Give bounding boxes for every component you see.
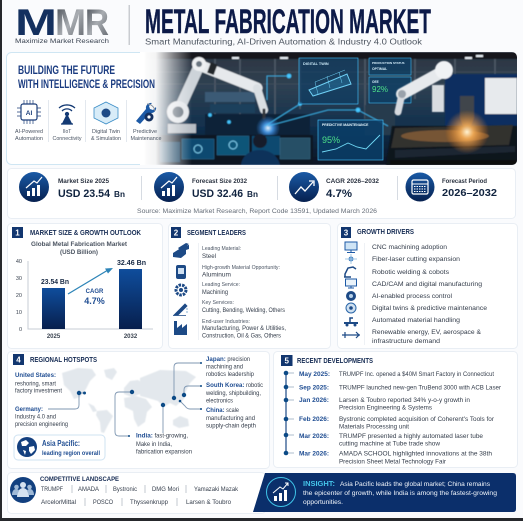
icon: people [10, 477, 36, 503]
label: China: China: scale [206, 407, 240, 414]
label: India: Make in India, [136, 442, 172, 448]
label: United States: reshoring, smart [15, 382, 56, 388]
label: South Korea: electronics [206, 398, 233, 404]
CAGR callout: CAGR [86, 289, 104, 295]
company names: Yamazaki Mazak [194, 487, 239, 493]
panel: key stats [8, 168, 516, 218]
stat: forecast size 2032 [154, 172, 258, 202]
icon labels: Digital Twin [92, 129, 120, 135]
heading 3: GROWTH DRIVERS [357, 229, 414, 236]
label: United States: factory investment [15, 388, 62, 394]
icon labels: Maintenance [130, 136, 162, 142]
callout: Asia Pacific: Asia Pacific: [42, 439, 80, 448]
source note: Source: Maximize Market Research, Report Code 13591, Updated March 2026 [137, 209, 378, 215]
icon labels: & Simulation [91, 136, 121, 142]
label: China: supply-chain depth [206, 424, 256, 430]
header: logo: R [85, 2, 109, 43]
stat: forecast size 2032: USD 32.46 [192, 188, 243, 200]
label: India: fabrication expansion [136, 450, 192, 456]
driver list: CNC machining adoption [372, 244, 447, 251]
panel 3: growth drivers [338, 224, 518, 348]
segment list: Cutting, Bending, Welding, Others [202, 308, 285, 314]
segment list: Leading Material: [202, 246, 241, 252]
label: South Korea: welding, shipbuilding, [205, 391, 261, 397]
event: Sep 2025: Sep 2025: [299, 384, 329, 392]
icon: steel beams [173, 243, 189, 258]
driver list: AI-enabled process control [372, 293, 452, 300]
hero heading: WITH INTELLIGENCE & PRECISION [18, 79, 155, 91]
label: United States [15, 372, 62, 394]
predictive maintenance panel: PREDICTIVE MAINTENANCE [322, 123, 369, 127]
event: Mar 2026 laser tube: TRUMPF presented a highly automated laser tube [339, 434, 484, 440]
driver list: Automated material handling [372, 317, 460, 324]
company names [41, 485, 239, 506]
world map [62, 368, 196, 433]
driver list: Digital twins & predictive maintenance [372, 305, 487, 312]
event: Jan 2026: Jan 2026: [299, 397, 329, 404]
panel 5: recent developments [274, 352, 518, 468]
label: China [206, 407, 256, 430]
stat: forecast period: 2026–2032 [442, 188, 497, 199]
label: South Korea [205, 382, 263, 404]
company names: TRUMPF [41, 487, 63, 493]
stat: market size 2025 [19, 172, 125, 202]
icon: factory [174, 321, 187, 335]
stat: market size 2025: USD 23.54 [58, 188, 111, 200]
label: India [136, 432, 192, 456]
icon labels: Automation [15, 136, 43, 142]
competitive heading: COMPETITIVE LANDSCAPE [40, 476, 120, 483]
label: Germany: Germany: [15, 406, 43, 413]
bar chart [16, 259, 153, 340]
driver list [364, 243, 487, 345]
segment list: Aluminum [202, 272, 231, 278]
predictive maintenance panel: 95% [322, 135, 340, 145]
event: Mar 2026 AMADA: Mar 2026: [299, 450, 329, 458]
laser machine and right robot arm [398, 61, 517, 128]
label: Germany [15, 406, 68, 428]
white fade over photo [140, 50, 192, 167]
company names: ArcelorMittal [41, 500, 76, 506]
subtitle: Smart Manufacturing, AI-Driven Automation & Industry 4.0 Outlook [145, 36, 423, 46]
header divider [128, 5, 130, 45]
panel 1: market size and growth outlook [8, 224, 162, 348]
predictive maintenance panel [318, 120, 383, 160]
stat: market size 2025: Market Size 2025 [58, 179, 110, 185]
event: Feb 2026: Materials Processing unit [339, 424, 409, 430]
segment list: Manufacturing, Power & Utilities, [202, 326, 286, 332]
segment list: Steel [202, 254, 216, 260]
chart title: Global Metal Fabrication Market [31, 242, 127, 248]
stat: CAGR [289, 172, 380, 202]
icon: digital twin cube [94, 102, 118, 124]
label: South Korea: South Korea: robotic [206, 382, 263, 389]
bar chart: 0 [19, 327, 22, 333]
hero heading: BUILDING THE FUTURE [18, 65, 115, 77]
icon: predictive maintenance wrench and gear [136, 103, 156, 124]
digital twin panel [299, 58, 358, 104]
label: Japan: robotics leadership [206, 372, 255, 378]
event: Mar 2026 AMADA: Precision Sheet Metal Technology Fair [339, 460, 446, 466]
segment list [198, 243, 286, 340]
OEE panel: OEE [372, 80, 379, 84]
event: Jan 2026: Precision Engineering & Systems [339, 406, 432, 412]
company names: Thyssenkrupp [130, 500, 169, 506]
heading 1: 1 [15, 228, 20, 238]
header: logo: M [15, 2, 57, 43]
insight text: opportunities. [303, 499, 343, 506]
heading 4: REGIONAL HOTSPOTS [30, 357, 97, 364]
heading 3: 3 [344, 228, 349, 238]
control monitors [160, 134, 313, 162]
event: Jan 2026: Larsen & Toubro reported 34% y-o-y growth in [339, 398, 470, 404]
segment list: Construction, Oil & Gas, Others [202, 334, 281, 340]
production status panel: PRODUCTION STATUS [372, 61, 405, 65]
OEE panel: 92% [372, 85, 388, 94]
heading 3 [341, 227, 414, 238]
icon: IIoT antenna [59, 105, 75, 124]
bar chart: 40 [16, 259, 22, 265]
event: Mar 2026 laser tube: cutting machine at Tube trade show [339, 442, 441, 448]
operator silhouette [241, 134, 280, 165]
bar chart: 10 [16, 310, 22, 316]
segment list: Key Services: [202, 300, 234, 306]
label: Germany: Industry 4.0 and [15, 414, 56, 420]
panel: insight [253, 473, 516, 512]
driver list: Fiber-laser cutting expansion [372, 256, 460, 263]
event: Jan 2026 [299, 397, 470, 412]
bar chart: 2025 [47, 334, 61, 340]
digital network lines [208, 74, 388, 126]
panel 2: segment leaders [168, 224, 330, 348]
CAGR callout [84, 289, 105, 306]
panel 4: regional hotspots [8, 352, 270, 468]
driver list: Robotic welding & cobots [372, 269, 449, 276]
icon: gear machining [176, 285, 186, 295]
label: United States: United States: [15, 372, 56, 379]
event: Mar 2026 laser tube: Mar 2026: [299, 433, 329, 440]
bar chart: 23.54 Bn [41, 279, 69, 286]
event: May 2025: TRUMPF Inc. opened a $40M Smart Factory in Connecticut [339, 372, 494, 378]
heading 5: RECENT DEVELOPMENTS [297, 358, 373, 365]
chart title: (USD Billion) [60, 250, 98, 256]
company names: AMADA [78, 487, 99, 493]
event: Mar 2026 laser tube [299, 433, 484, 448]
label: Japan [206, 356, 255, 378]
heading 4: 4 [16, 356, 21, 364]
welding spark [256, 116, 280, 136]
hero heading [18, 65, 155, 91]
event: Sep 2025 [299, 384, 501, 392]
bar chart: 2032 [124, 334, 138, 340]
icon labels [15, 100, 162, 142]
panel: hero banner [6, 50, 520, 167]
panel: competitive landscape [8, 472, 266, 514]
bar chart: 30 [16, 276, 22, 282]
heading 5: 5 [284, 356, 289, 366]
icon: AI chip: AI [26, 110, 32, 117]
stat: forecast size 2032: Bn [247, 189, 258, 199]
heading 2: 2 [174, 228, 179, 238]
bar chart: 32.46 Bn [117, 260, 146, 267]
production status panel: OPTIMAL [372, 67, 387, 71]
company names: DMG Mori [152, 487, 179, 493]
icon: welding [173, 304, 188, 316]
label: Japan: machining and [206, 364, 243, 370]
stat: CAGR: 4.7% [326, 188, 352, 200]
bar chart: 20 [16, 293, 22, 299]
segment list: End-user Industries: [202, 319, 250, 325]
company names: POSCO [93, 500, 113, 506]
event: May 2025: May 2025: [299, 371, 330, 378]
event: Sep 2025: TRUMPF launched new-gen TruBend 3000 with ACB Laser [339, 386, 501, 392]
event: Feb 2026: Feb 2026: [299, 416, 329, 423]
heading 2 [171, 227, 246, 238]
event: Mar 2026 AMADA: AMADA SCHOOL highlighted innovations at the 38th [339, 452, 492, 458]
heading 1: MARKET SIZE & GROWTH OUTLOOK [30, 230, 141, 237]
icon: aluminum can [176, 265, 186, 279]
stat: forecast size 2032: Forecast Size 2032 [192, 179, 248, 185]
heading 4 [13, 354, 97, 365]
map leader lines [48, 362, 202, 437]
driver list: CAD/CAM and digital manufacturing [372, 281, 482, 288]
event: Feb 2026: Bystronic completed acquisition of Coherent's Tools for [339, 417, 494, 423]
digital twin panel: DIGITAL TWIN [303, 62, 329, 66]
event: Feb 2026 [299, 416, 494, 430]
company names: Bystronic [113, 487, 137, 493]
insight text: INSIGHT: [303, 479, 335, 488]
hero factory illustration [140, 50, 520, 167]
header: logo: Maximize Market Research [15, 38, 110, 45]
driver list: infrastructure demand [372, 338, 440, 345]
chart title [31, 242, 127, 256]
stat: forecast period [406, 172, 497, 202]
heading 2: SEGMENT LEADERS [187, 230, 246, 237]
CAGR callout: 4.7% [84, 296, 105, 306]
event: Mar 2026 AMADA [299, 450, 492, 466]
label: Germany: precision engineering [15, 422, 68, 428]
label: Japan: Japan: precision [206, 356, 250, 363]
insight text: Asia Pacific leads the global market; China remains [340, 481, 490, 488]
insight text: the epicenter of growth, while India is among the fastest-growing [303, 490, 498, 497]
callout: Asia Pacific [14, 435, 105, 460]
icon labels: AI-Powered [15, 129, 43, 135]
timeline [284, 371, 294, 455]
insight text [303, 479, 498, 506]
label: China: manufacturing and [206, 416, 255, 422]
robot arm: left [167, 57, 264, 133]
segment list: Machining [202, 290, 228, 296]
stat: CAGR: CAGR 2026–2032 [326, 179, 380, 185]
event: May 2025 [299, 371, 494, 378]
icon labels: Predictive [133, 129, 157, 135]
icon labels: IIoT [63, 129, 71, 135]
label: India: India: fast-growing, [136, 432, 188, 440]
icon: growth chart [266, 478, 296, 506]
arrow: growth [68, 268, 113, 294]
driver icons [342, 242, 360, 338]
icon: globe [17, 437, 37, 457]
icon labels: Connectivity [52, 136, 82, 142]
segment list: Leading Service: [202, 282, 240, 288]
icon: AI chip [17, 100, 41, 124]
stat: forecast period: Forecast Period [442, 179, 487, 185]
segment list: High-growth Material Opportunity: [202, 265, 280, 271]
header: logo: M [55, 2, 86, 43]
OEE panel [369, 77, 411, 103]
header: logo [15, 2, 110, 45]
heading 1 [12, 227, 141, 238]
company names: Larsen & Toubro [186, 500, 232, 506]
laser cutting table [386, 110, 517, 165]
driver list: Renewable energy, EV, aerospace & [372, 329, 482, 336]
stat: market size 2025: Bn [114, 189, 125, 199]
production status panel [369, 58, 411, 75]
heading 5 [281, 355, 373, 366]
callout: Asia Pacific: leading region overall [42, 451, 100, 457]
